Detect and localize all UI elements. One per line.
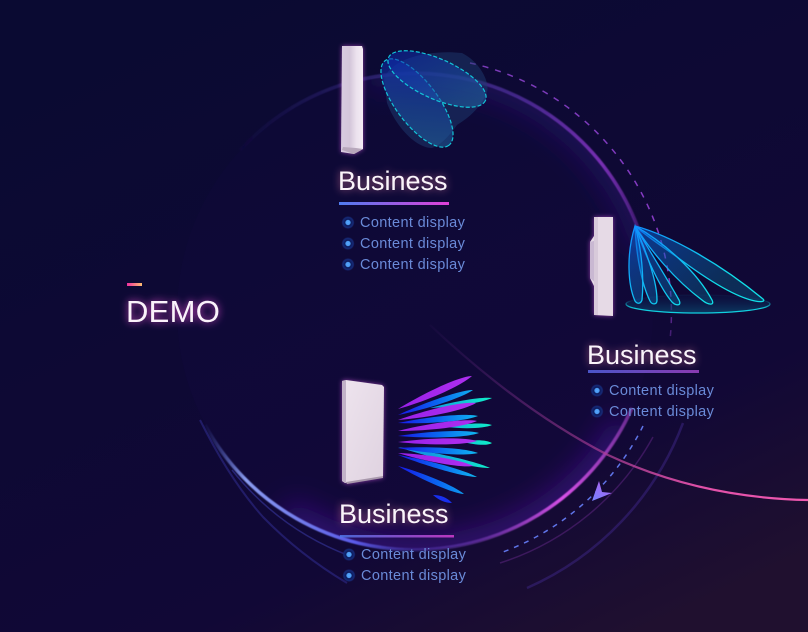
panel: right business xyxy=(587,217,770,420)
heading underline xyxy=(340,535,454,538)
list item 2: Content display xyxy=(361,568,467,584)
heading: Business: Business xyxy=(338,166,448,196)
heading: DEMO xyxy=(126,283,220,329)
icon: beam fan bottom xyxy=(398,376,492,503)
main ring: upper arc xyxy=(240,73,645,250)
arrow icon xyxy=(592,481,612,501)
list item 2: Content display xyxy=(609,404,715,420)
list xyxy=(342,547,467,584)
icon: panel antenna right xyxy=(590,217,613,316)
panel: bottom business xyxy=(339,376,492,584)
icon: panel antenna bottom xyxy=(342,380,384,484)
heading underline xyxy=(339,202,449,205)
dashed orbit path xyxy=(470,63,671,340)
heading: Business: Business xyxy=(587,340,697,370)
pink curve xyxy=(430,325,808,500)
DEMO text: DEMO xyxy=(126,294,220,329)
list item 3: Content display xyxy=(360,257,466,273)
list item 2: Content display xyxy=(360,236,466,252)
icon: radiation lobes right xyxy=(626,226,770,313)
dashed orbit path: lower blue section xyxy=(503,426,643,552)
central circle glow xyxy=(274,76,640,550)
main ring: lower arc xyxy=(205,408,632,550)
list item 1: Content display xyxy=(360,215,466,231)
accent dash xyxy=(127,283,142,286)
icon: panel antenna top xyxy=(341,46,363,154)
list item 1: Content display xyxy=(609,383,715,399)
list xyxy=(342,215,466,273)
list item 1: Content display xyxy=(361,547,467,563)
icon: radiation beam top xyxy=(368,39,494,158)
heading underline xyxy=(588,370,699,373)
outer orbit rings xyxy=(200,420,683,588)
list xyxy=(590,383,715,420)
panel: top business xyxy=(338,39,494,273)
heading: Business: Business xyxy=(339,499,449,529)
